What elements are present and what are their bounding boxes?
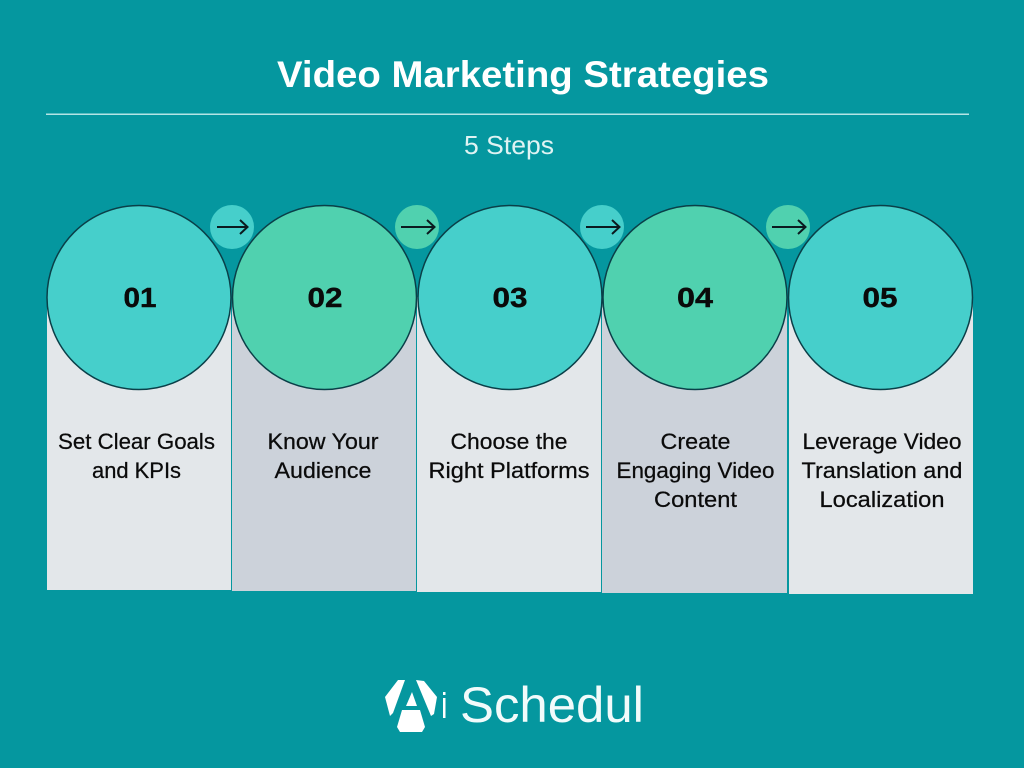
icon: logo mark — [385, 680, 446, 732]
step 4 text: Create — [660, 429, 730, 454]
step 1 number circle — [47, 206, 231, 390]
step 3 text: Choose the — [450, 429, 568, 454]
step 2 number circle — [232, 206, 416, 390]
step 3 text: Right Platforms — [428, 458, 590, 483]
panel: step 2 card — [232, 297, 416, 591]
step 2 number circle: 02 — [308, 282, 342, 313]
logo wordmark: Schedul — [460, 677, 644, 733]
panel: step 1 card — [47, 297, 231, 590]
step 4 number circle: 04 — [677, 282, 713, 313]
step 5 number circle — [788, 206, 972, 390]
title: Video Marketing Strategies — [277, 54, 769, 95]
step 2 text: Know Your — [268, 429, 378, 454]
step 3 number circle — [418, 206, 602, 390]
step 1 number circle: 01 — [124, 282, 156, 313]
step 5 text: Leverage Video — [802, 429, 962, 454]
step 4 text: Engaging Video — [616, 458, 774, 483]
step 1 text: Set Clear Goals — [58, 429, 215, 454]
step 1 text: and KPIs — [92, 458, 181, 483]
step 5 number circle: 05 — [862, 282, 898, 313]
step 2 text: Audience — [274, 458, 372, 483]
logo: Ai Schedul — [385, 677, 644, 733]
icon: arrow badge 3 to 4 — [580, 205, 624, 249]
step 4 text: Content — [654, 487, 737, 512]
step 5 text: Localization — [820, 487, 944, 512]
panel: step 3 card — [417, 297, 601, 592]
icon: arrow badge 4 to 5 — [766, 205, 810, 249]
panel: step 5 card — [789, 297, 973, 594]
step 5 text: Translation and — [802, 458, 962, 483]
step 4 number circle — [603, 206, 787, 390]
panel: step 4 card — [602, 297, 787, 593]
icon: arrow badge 1 to 2 — [210, 205, 254, 249]
subtitle: 5 Steps — [464, 130, 554, 160]
step 3 number circle: 03 — [492, 282, 528, 313]
icon: arrow badge 2 to 3 — [395, 205, 439, 249]
